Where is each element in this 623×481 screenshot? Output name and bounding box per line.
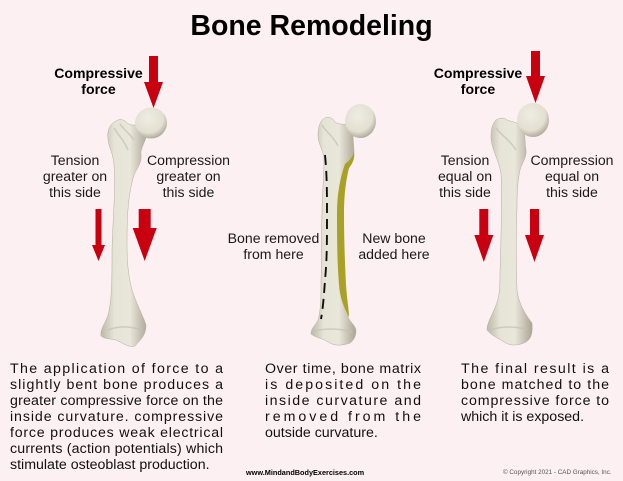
icon: straight femur — [486, 103, 549, 346]
text: force explanation: inside curvature. compressive — [10, 409, 223, 425]
dashed line: bone removed — [320, 154, 328, 320]
text: force explanation: The application of force to a — [10, 361, 223, 377]
label: compressive force: force — [81, 81, 116, 97]
label: tension greater — [43, 152, 107, 200]
text: deposition explanation: is deposited on the — [265, 377, 421, 393]
label: compression greater — [147, 152, 230, 200]
panel: bone remodeling — [228, 104, 430, 441]
arrow: compressive force — [526, 51, 545, 103]
label: new bone — [358, 230, 430, 262]
panel: bent bone under force — [10, 56, 230, 473]
new bone layer — [337, 152, 354, 317]
text: result explanation: compressive force to — [461, 393, 609, 409]
label: tension greater: greater on — [43, 168, 107, 184]
label: compression greater: greater on — [156, 168, 221, 184]
text: force explanation: stimulate osteoblast production. — [10, 457, 210, 473]
arrow: tension — [92, 209, 105, 261]
label: compressive force: force — [461, 81, 495, 97]
label: compression equal: Compression — [530, 152, 614, 168]
icon: bent femur — [100, 108, 167, 347]
copyright footer: © Copyright 2021 - CAD Graphics, Inc. — [503, 469, 612, 476]
text: result explanation: bone matched to the — [461, 377, 609, 393]
website footer: www.MindandBodyExercises.com — [246, 468, 364, 477]
label: compressive force — [434, 65, 522, 97]
text: force explanation: force produces weak electrical — [10, 425, 223, 441]
arrow: compression — [525, 209, 544, 262]
label: new bone: New bone — [362, 230, 426, 246]
label: compression greater: this side — [163, 184, 214, 200]
arrow: compression — [132, 209, 157, 261]
text: deposition explanation: removed from the — [265, 409, 421, 425]
label: tension equal — [438, 152, 492, 200]
label: bone removed — [228, 230, 319, 262]
text: deposition explanation: Over time, bone matrix — [265, 361, 421, 377]
arrow: tension — [474, 209, 494, 262]
label: tension equal: equal on — [438, 168, 492, 184]
title: Bone Remodeling — [190, 10, 433, 42]
text: deposition explanation: outside curvature. — [265, 425, 378, 441]
text: force explanation: greater compressive force on the — [10, 393, 223, 409]
label: compression equal: equal on — [545, 168, 599, 184]
label: tension greater: Tension — [51, 152, 99, 168]
label: compression equal — [530, 152, 614, 200]
text: force explanation — [10, 361, 224, 473]
text: force explanation: slightly bent bone produces a — [10, 377, 223, 393]
text: force explanation: currents (action potentials) which — [10, 441, 223, 457]
label: compressive force: Compressive — [54, 65, 143, 81]
label: bone removed: from here — [243, 246, 304, 262]
label: bone removed: Bone removed — [228, 230, 319, 246]
label: new bone: added here — [358, 246, 430, 262]
text: result explanation — [460, 361, 610, 425]
text: deposition explanation: inside curvature and — [265, 393, 421, 409]
label: compressive force: Compressive — [434, 65, 522, 81]
label: compression equal: this side — [546, 184, 598, 200]
label: compressive force — [54, 65, 143, 97]
label: tension equal: this side — [439, 184, 491, 200]
text: result explanation: The final result is a — [461, 361, 609, 377]
label: tension greater: this side — [49, 184, 101, 200]
arrow: compressive force — [144, 56, 163, 108]
label: tension equal: Tension — [441, 152, 489, 168]
panel: remodeled bone — [434, 51, 614, 425]
text: result explanation: which it is exposed. — [460, 409, 584, 425]
icon: remodeling femur — [310, 104, 376, 346]
text: deposition explanation — [265, 361, 421, 441]
label: compression greater: Compression — [147, 152, 230, 168]
